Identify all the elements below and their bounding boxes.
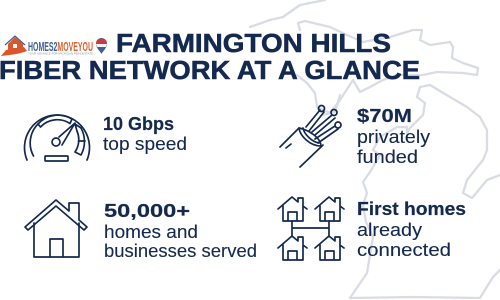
icon: connected houses bbox=[278, 197, 344, 260]
stat label: homes and bbox=[104, 222, 198, 242]
logo balloon bbox=[96, 38, 107, 54]
title line 2: FIBER NETWORK AT A GLANCE bbox=[0, 57, 420, 85]
stat value: $70M bbox=[357, 106, 412, 126]
stat value: First homes bbox=[357, 199, 466, 219]
stat: first homes connected bbox=[278, 197, 466, 260]
stat: funding bbox=[280, 106, 430, 167]
stat: funding: funded bbox=[357, 147, 418, 167]
stat label: privately bbox=[357, 127, 430, 147]
logo wordmark: HOMES2MOVEYOU bbox=[28, 40, 93, 54]
stat: homes served: businesses served bbox=[104, 241, 257, 261]
title line 1: FARMINGTON HILLS bbox=[116, 30, 391, 58]
logo tagline: YOUR ADVANCE FOR MICHIGAN REAL ESTATE bbox=[28, 52, 93, 56]
stat: top speed bbox=[24, 114, 187, 161]
stat value: 50,000+ bbox=[104, 201, 190, 221]
stat value: 10 Gbps bbox=[103, 114, 174, 134]
stat label: top speed bbox=[103, 134, 187, 154]
background map of Michigan bbox=[250, 0, 500, 298]
logo: Homes2MoveYou bbox=[1, 36, 107, 56]
icon: house bbox=[25, 200, 87, 257]
icon: speedometer bbox=[24, 115, 90, 161]
stat: first homes connected: connected bbox=[357, 240, 451, 260]
title bbox=[0, 30, 420, 85]
stat: homes served bbox=[25, 200, 257, 261]
logo house icon bbox=[1, 36, 27, 56]
icon: fiber optic cable bbox=[280, 106, 341, 167]
stat label: already bbox=[357, 220, 422, 240]
